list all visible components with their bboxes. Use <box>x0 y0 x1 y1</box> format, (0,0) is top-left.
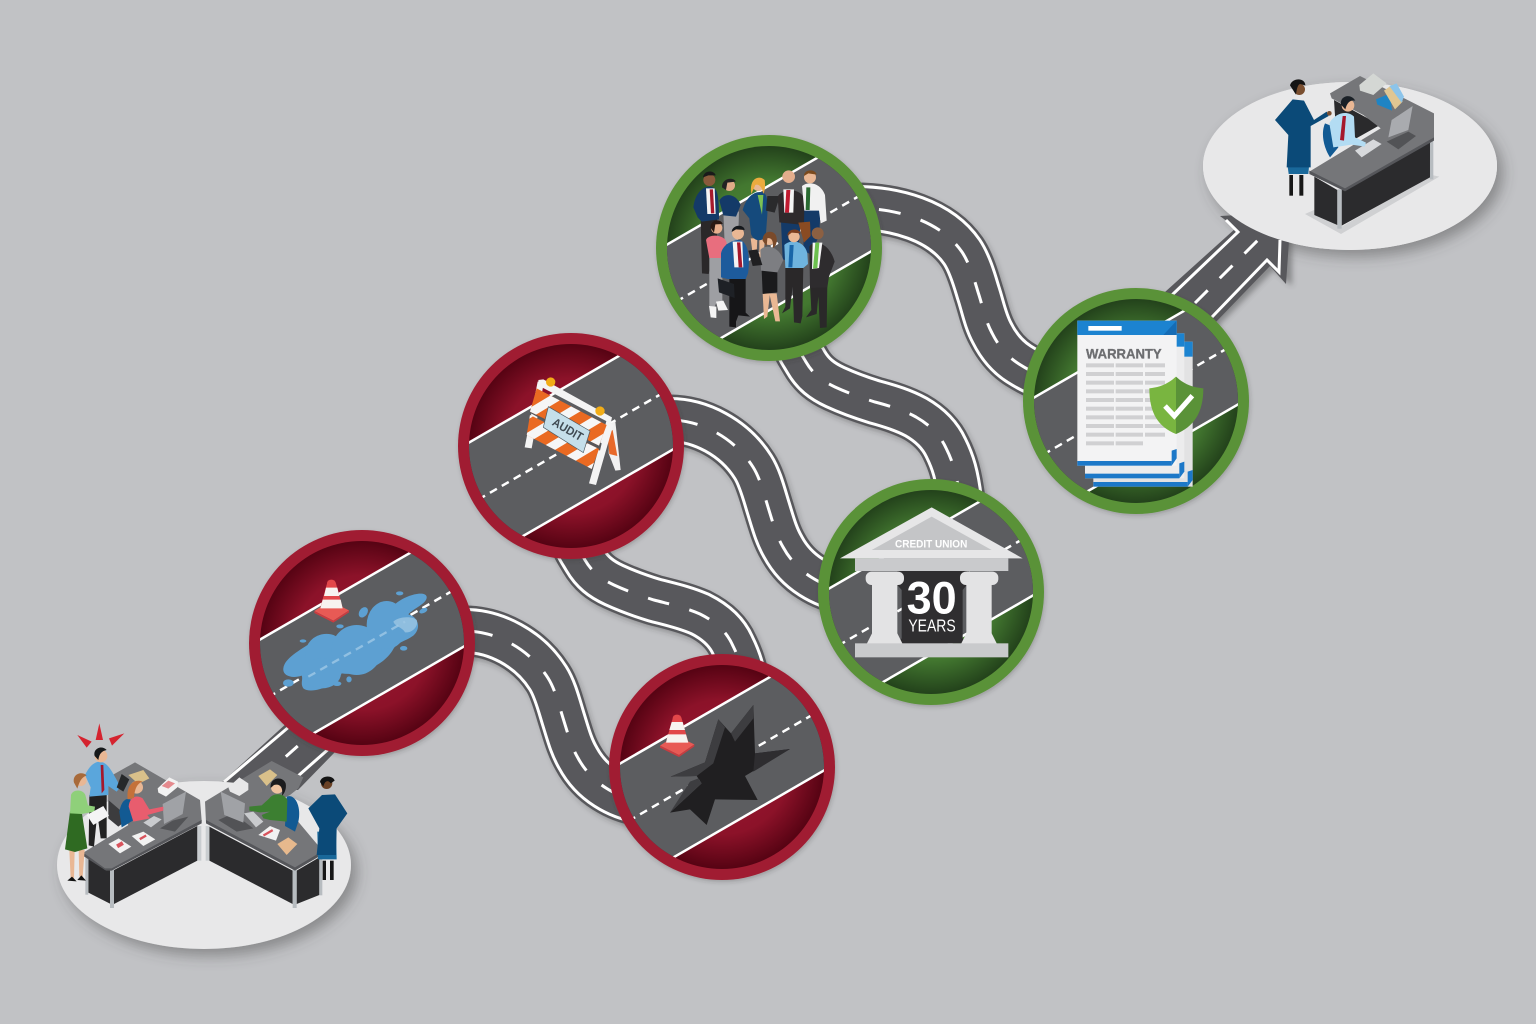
circle 1: puddle hazard <box>248 530 478 760</box>
barricade <box>524 377 621 485</box>
desk: right <box>205 761 323 908</box>
circle 5: team of people <box>655 135 885 365</box>
platform: start office <box>57 781 351 949</box>
road: circle 4 to circle 5 <box>795 340 963 504</box>
platform: finish office surface <box>1203 82 1497 250</box>
stacked warranty pages <box>1077 321 1193 487</box>
audit sign <box>543 407 590 453</box>
desk shadow on floor <box>1305 175 1439 234</box>
icon: red alert marks <box>77 723 124 748</box>
bank building: YEARS <box>908 616 956 636</box>
circle 4: credit union 30 years <box>817 478 1047 709</box>
arrow road to finish <box>1165 214 1292 328</box>
puddle <box>283 591 428 690</box>
audit sign: AUDIT <box>550 415 586 444</box>
person 5: white shirt man <box>802 170 827 254</box>
person 8: woman gray jacket <box>748 232 783 321</box>
person: standing woman in navy <box>1275 79 1332 196</box>
person 9: light blue shirt man <box>782 222 811 323</box>
person 3: blonde woman <box>743 178 780 257</box>
person 4: bald man <box>778 170 807 261</box>
pothole <box>670 705 790 825</box>
person 1: navy suit <box>693 172 719 274</box>
stacked warranty pages: WARRANTY <box>1086 346 1162 362</box>
table rows <box>1086 363 1165 445</box>
panel: finish office scene <box>1275 73 1439 234</box>
person: seated woman in pink <box>119 781 163 827</box>
traffic cone <box>660 715 694 757</box>
desk <box>1309 76 1434 229</box>
person: standing woman in navy <box>308 777 347 880</box>
panel: start office scene <box>65 723 347 908</box>
bank building <box>840 507 1023 657</box>
road: circle 5 to circle 6 <box>855 208 1058 383</box>
road: circle 3 to circle 2 <box>574 538 750 702</box>
office supplies <box>1359 73 1404 111</box>
icon: green shield with check <box>1149 377 1203 434</box>
person 2: woman with gray pants <box>719 179 741 244</box>
person: standing man in blue shirt <box>85 748 129 847</box>
road: circle 1 to circle 3 <box>465 631 643 805</box>
person 7: blue jacket man <box>718 226 750 327</box>
bank building: CREDIT UNION <box>895 538 967 550</box>
road: circle 2 to circle 4 <box>670 420 848 594</box>
platform: finish office shadow <box>1203 82 1497 250</box>
bank building: 30 <box>907 572 957 623</box>
circle 6: warranty document <box>1022 288 1252 518</box>
desk: left <box>83 762 202 908</box>
circle 2: audit barricade <box>457 333 688 563</box>
person 6: woman pink top <box>706 221 728 318</box>
person: standing woman in green <box>65 773 109 881</box>
person: seated woman in green <box>249 778 299 832</box>
person 10: dark suit man <box>806 227 835 328</box>
traffic cone <box>314 580 349 623</box>
start road to first circle <box>220 722 335 790</box>
person: seated man at desk <box>1323 96 1366 157</box>
people group <box>693 170 835 328</box>
circle 3: pothole hazard <box>608 654 838 884</box>
